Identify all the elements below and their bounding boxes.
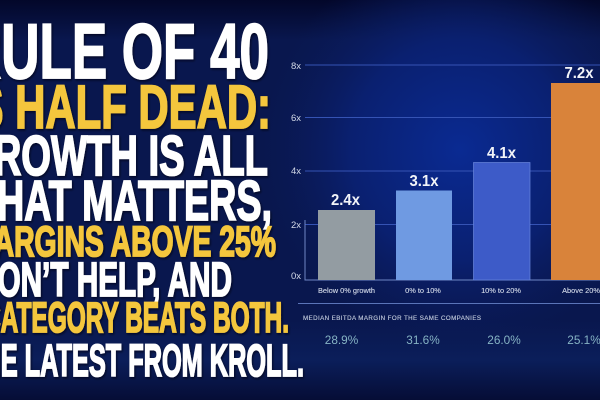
- bar: 10% to 20%: [474, 162, 530, 280]
- margin table: [303, 315, 600, 347]
- y axis labels: [291, 61, 301, 282]
- y axis labels: 2x: [291, 220, 301, 231]
- margin values: 26.0%: [487, 333, 521, 347]
- margin values: 25.1%: [567, 333, 600, 347]
- headline: [0, 7, 304, 386]
- y axis labels: 4x: [291, 166, 301, 177]
- value labels: 3.1x: [410, 173, 439, 190]
- value labels: 2.4x: [331, 192, 360, 209]
- bar: 0% to 10%: [396, 190, 452, 280]
- category labels: Below 0% growth: [318, 286, 375, 295]
- value labels: [331, 65, 594, 209]
- y axis labels: 6x: [291, 113, 301, 124]
- margin values: [325, 333, 600, 347]
- category labels: Above 20%: [562, 286, 600, 295]
- category labels: 0% to 10%: [405, 286, 441, 295]
- value labels: 7.2x: [564, 65, 594, 82]
- bar: above 20%: [551, 83, 600, 280]
- divider: [298, 302, 600, 304]
- value labels: 4.1x: [487, 145, 516, 162]
- y axis labels: 0x: [291, 271, 301, 282]
- category labels: [318, 286, 600, 295]
- category labels: 10% to 20%: [481, 286, 521, 295]
- bar: below 0% growth: [318, 210, 375, 280]
- y axis labels: 8x: [291, 61, 301, 72]
- bar chart: [291, 61, 600, 295]
- margin table heading: MEDIAN EBITDA MARGIN FOR THE SAME COMPANIES: [303, 315, 481, 322]
- margin values: 31.6%: [406, 333, 440, 347]
- axis: [305, 220, 600, 280]
- grid lines: [305, 65, 600, 224]
- margin values: 28.9%: [325, 333, 359, 347]
